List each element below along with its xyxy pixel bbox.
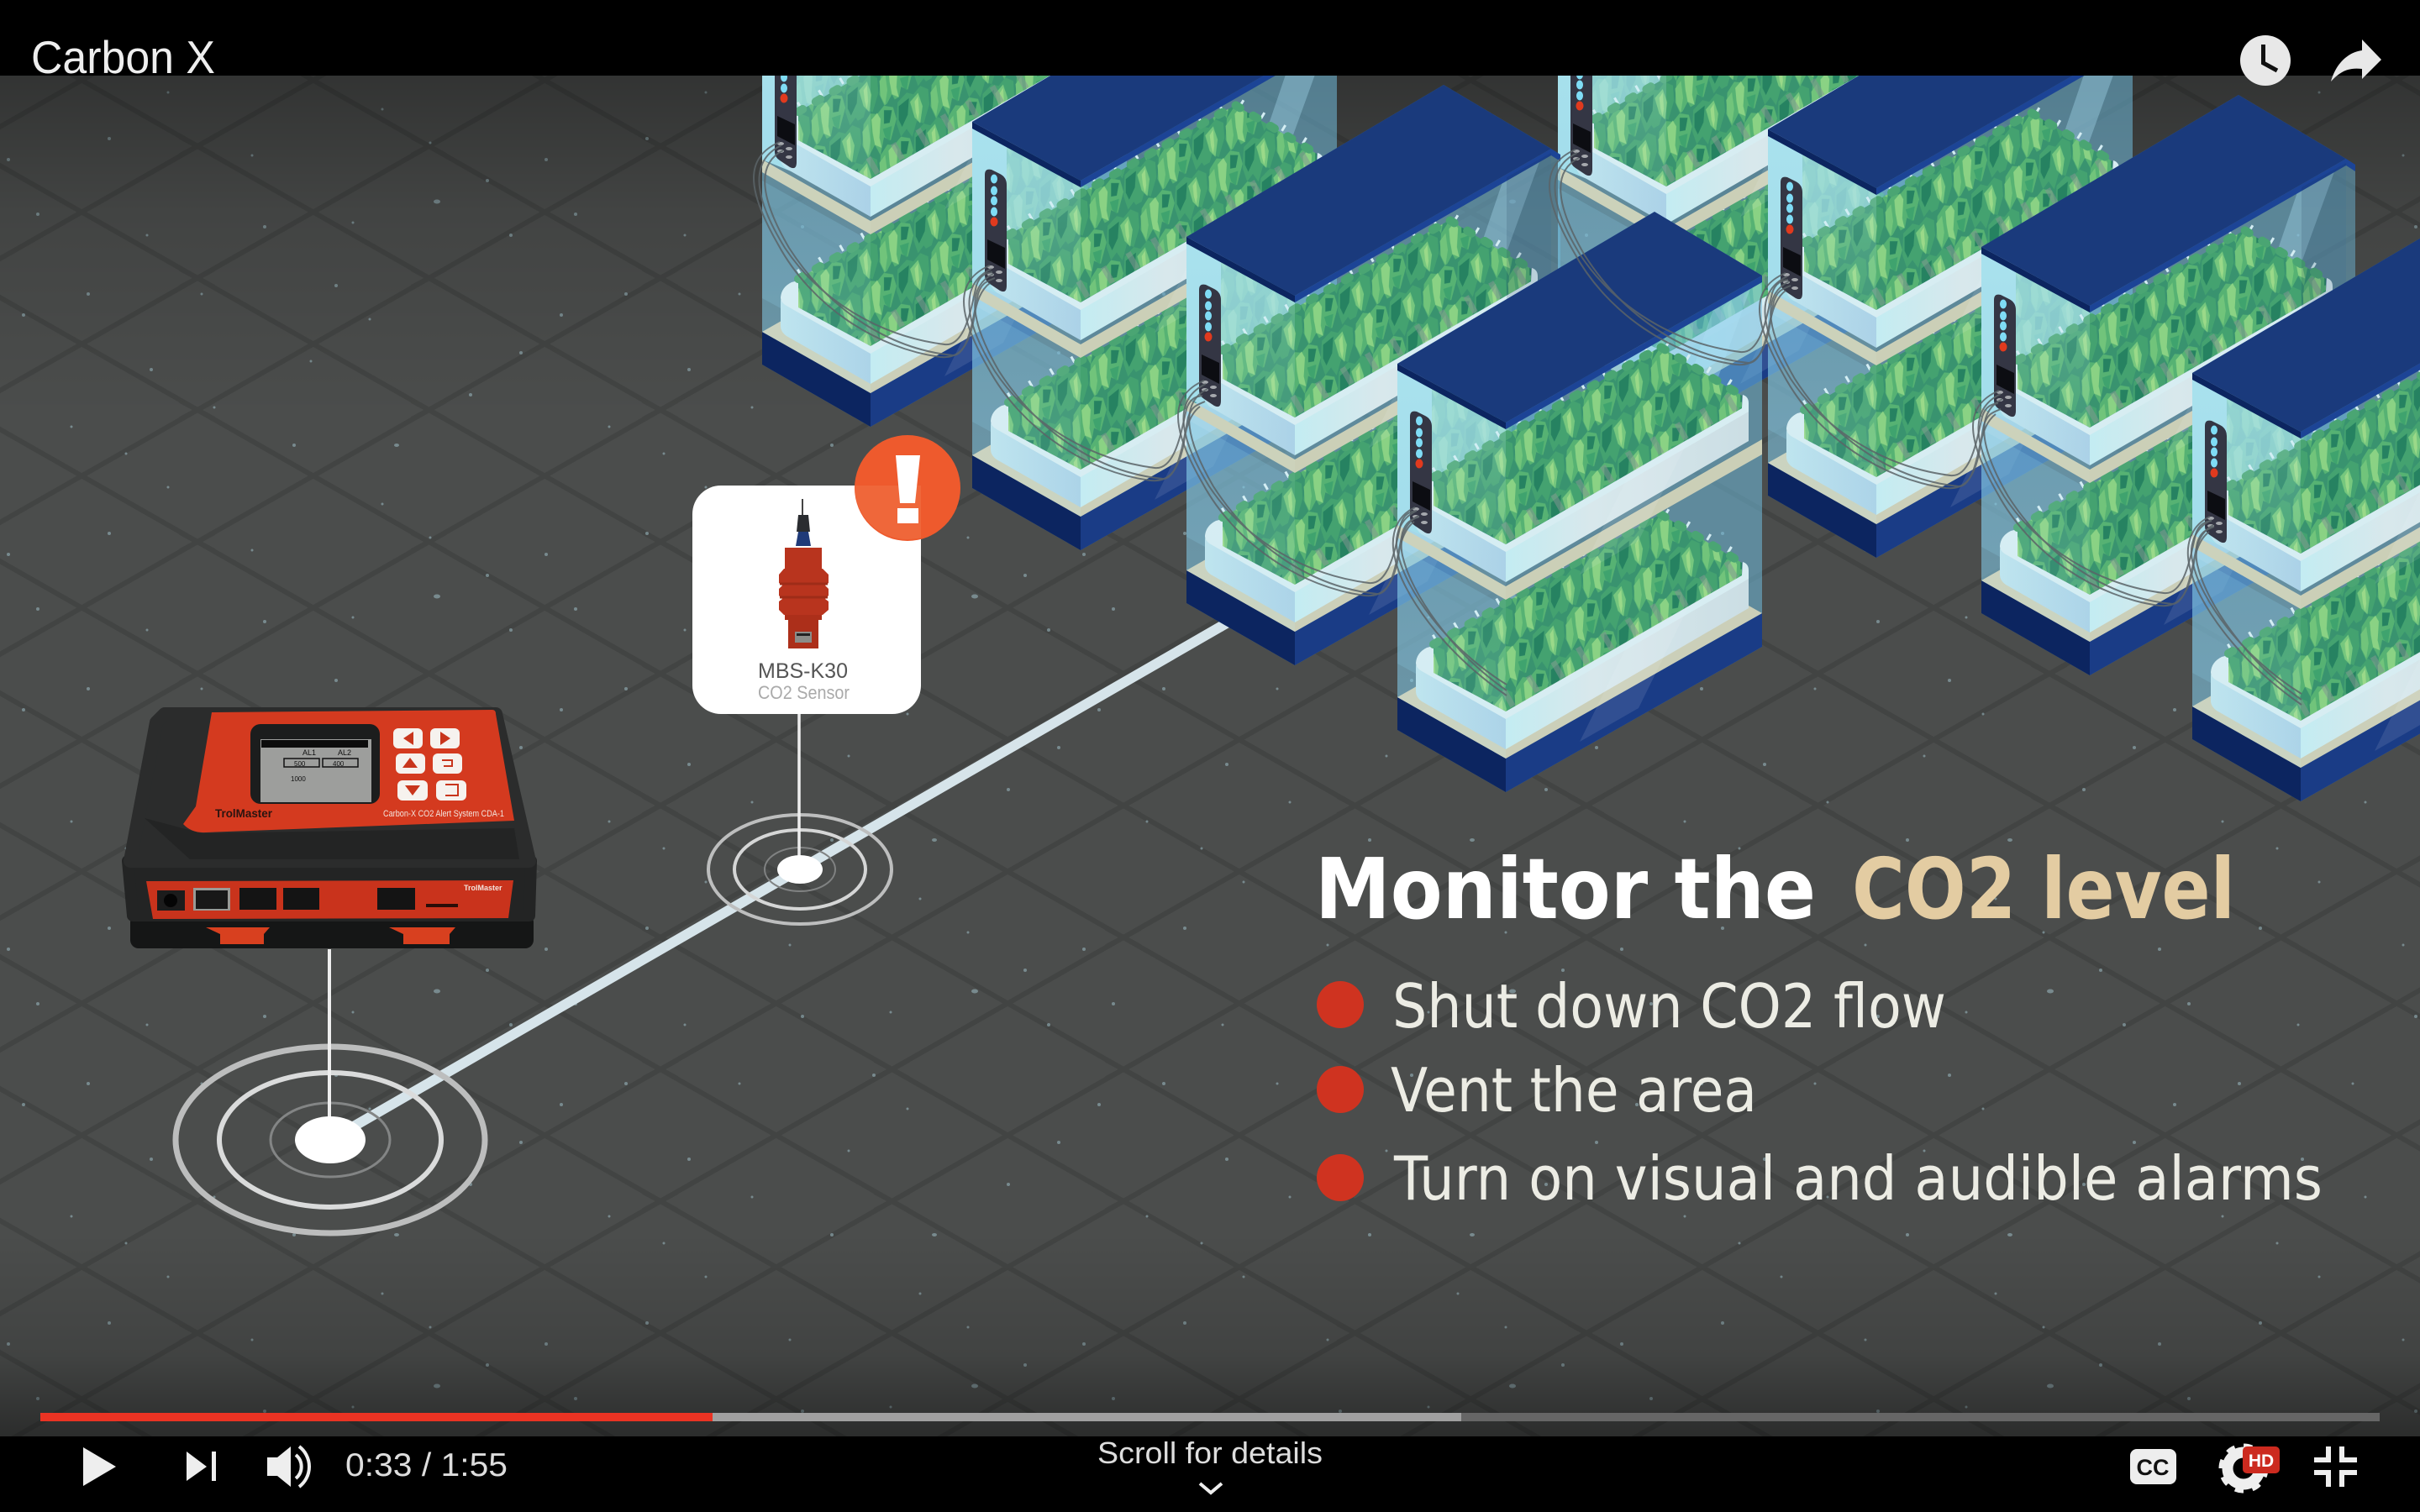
front port strip: TrolMaster (464, 884, 502, 892)
action list: Vent the area (1391, 1055, 1757, 1126)
progress bar (40, 1413, 2380, 1421)
scroll hint: Scroll for details (1097, 1436, 1323, 1470)
front port strip (146, 880, 513, 919)
rack 6 (1981, 95, 2355, 675)
action list: Shut down CO2 flow (1392, 971, 1946, 1042)
sensor type: CO2 Sensor (758, 682, 850, 703)
icon: play (83, 1447, 116, 1486)
action list (1317, 971, 2323, 1214)
rack 4 (762, 0, 1127, 427)
LCD screen: 400 (333, 760, 345, 768)
rack 2 (1186, 85, 1560, 665)
heading: Monitor the CO2 level: CO2 level (1852, 840, 2235, 938)
sensor illustration (779, 499, 829, 648)
icon: next (187, 1452, 216, 1481)
rack 1 (1397, 212, 1762, 792)
time readout: 0:33 / 1:55 (345, 1447, 508, 1483)
controller node rings (176, 949, 485, 1233)
LCD screen: AL2 (338, 748, 351, 757)
LCD screen: 1000 (291, 775, 306, 783)
heading: Monitor the CO2 level (1315, 840, 2235, 938)
alert badge: exclamation mark (855, 435, 960, 541)
icon: closed captions (2130, 1449, 2176, 1484)
top bar with video title: Carbon X (31, 31, 215, 83)
icon: chevron (1200, 1483, 1222, 1493)
rack 7 (1768, 0, 2133, 558)
bottom control bar (0, 1436, 2420, 1512)
heading: Monitor the CO2 level: Monitor the (1315, 840, 1816, 938)
icon: closed captions: CC (2136, 1455, 2170, 1480)
rack 5 (2192, 221, 2420, 801)
sensor node rings (708, 714, 892, 924)
controller device: TrolMaster Carbon-X (128, 710, 534, 948)
red top panel (183, 710, 514, 832)
mounting clips (206, 927, 270, 944)
top bar with video title (0, 0, 2420, 83)
LCD screen: 500 (294, 760, 306, 768)
controller device: TrolMaster Carbon-X: Carbon-X CO2 Alert System CDA-1 (383, 809, 504, 819)
rack group 1: left side grow racks (762, 0, 1762, 792)
rack 8 (1558, 0, 1923, 434)
LCD screen: AL1 (302, 748, 316, 757)
icon: settings gear with HD badge (2222, 1446, 2280, 1490)
action list: Turn on visual and audible alarms (1393, 1143, 2323, 1214)
icon: watch later clock (2240, 35, 2291, 86)
icon: settings gear with HD badge: HD (2249, 1452, 2274, 1471)
sensor cables between rack controllers (754, 142, 2302, 705)
rack group 2: right side grow racks (1558, 0, 2420, 801)
device labels: TrolMaster (215, 806, 273, 820)
icon: exit fullscreen (2314, 1446, 2357, 1487)
control buttons (393, 728, 466, 801)
LCD screen (250, 724, 380, 804)
sensor model: MBS-K30 (758, 659, 848, 683)
icon: share arrow (2331, 39, 2381, 81)
rack 3 (972, 0, 1337, 550)
sensor card: MBS-K30 CO2 sensor (692, 486, 921, 714)
connection line from controller to grow racks (330, 618, 1235, 1140)
icon: volume (267, 1446, 309, 1487)
